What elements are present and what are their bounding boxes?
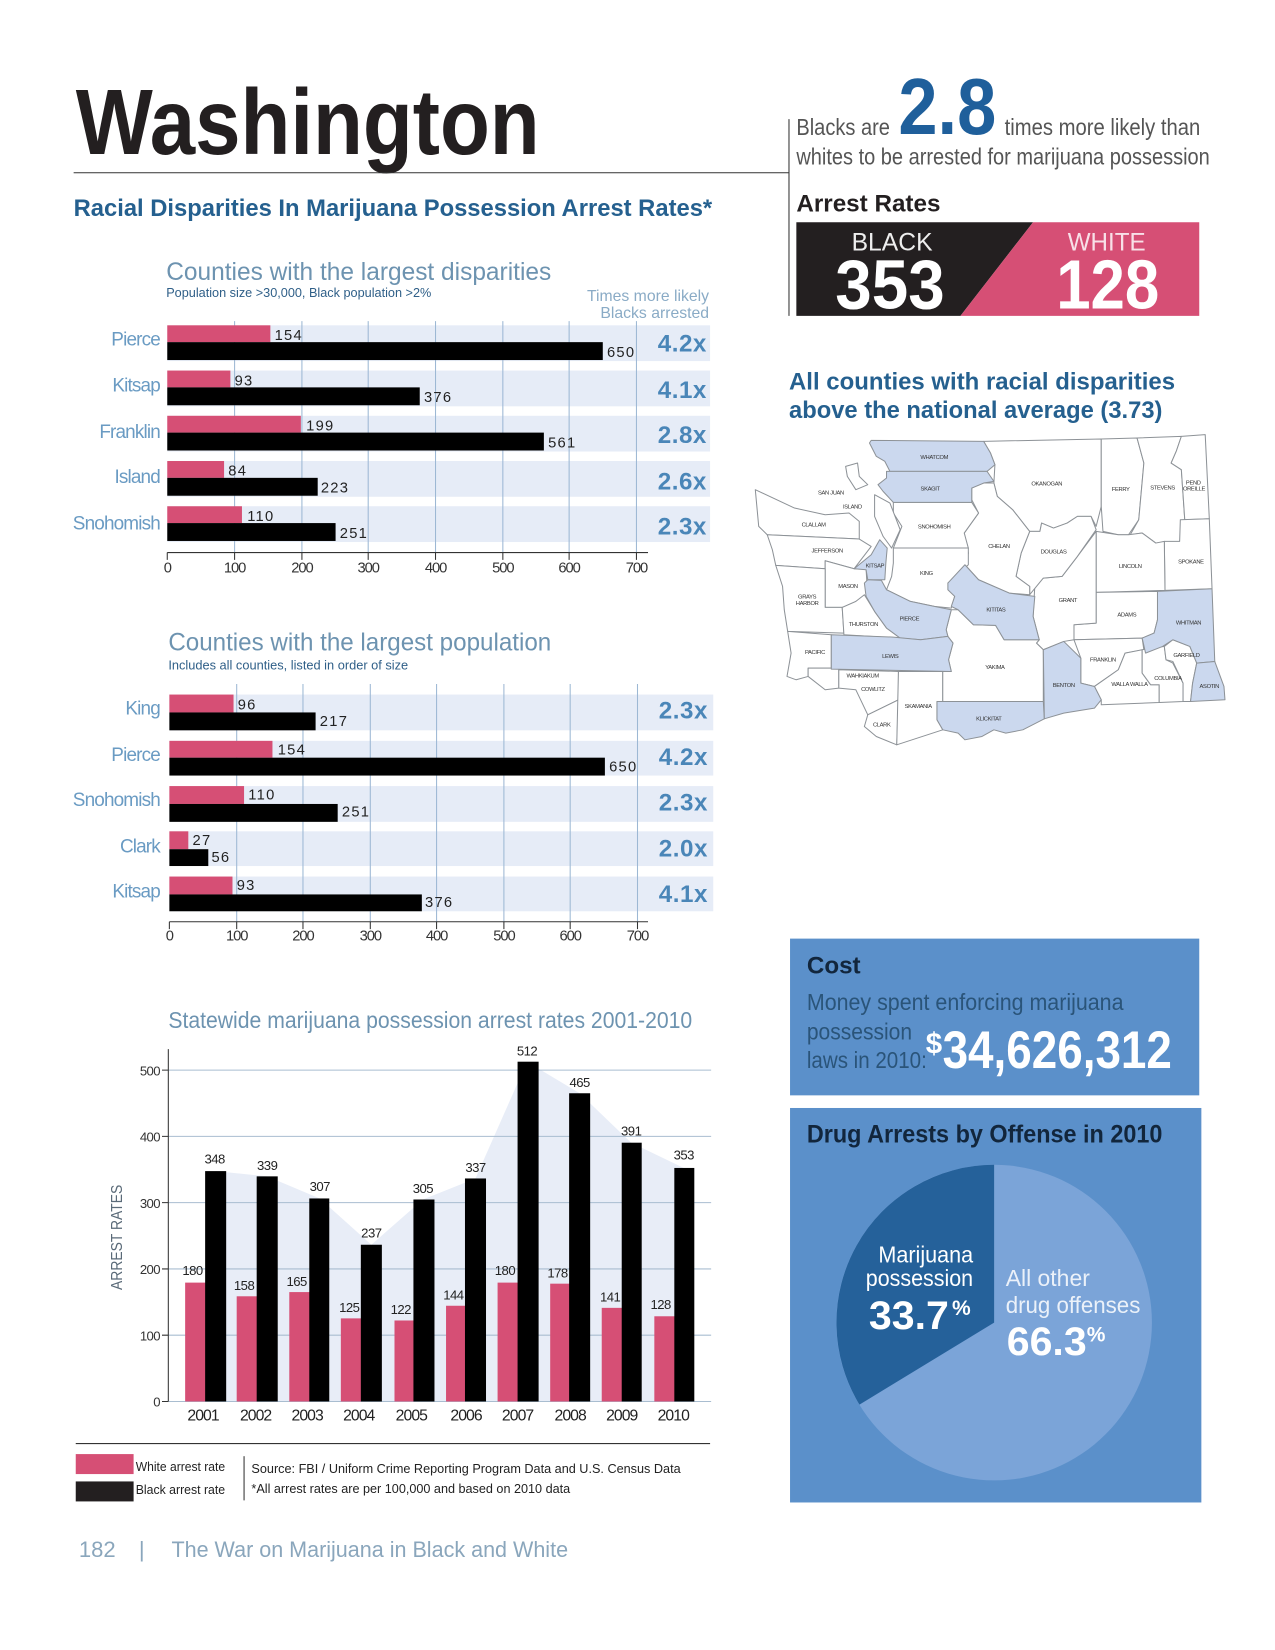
y axis: 500 xyxy=(140,1063,160,1078)
county labels: Clark xyxy=(120,836,161,857)
map: Washington counties: LEWIS xyxy=(882,654,899,660)
title: Washington xyxy=(76,70,540,174)
map: Washington counties: KLICKITAT xyxy=(976,717,1002,722)
county labels: Pierce xyxy=(111,329,160,350)
county labels: Snohomish xyxy=(73,513,160,534)
x axis: 400 xyxy=(425,561,447,577)
black value labels: 337 xyxy=(465,1160,486,1175)
multipliers: 4.1x xyxy=(658,377,707,404)
year labels: 2004 xyxy=(343,1407,376,1424)
map: Washington counties: ASOTIN xyxy=(1200,684,1219,690)
multipliers: 4.2x xyxy=(659,744,708,771)
y axis xyxy=(140,1049,168,1410)
map: Washington counties: SPOKANE xyxy=(1178,559,1204,565)
multipliers xyxy=(658,331,707,541)
map: Washington counties: SKAGIT xyxy=(921,486,941,492)
panel: cost: possession xyxy=(807,1019,912,1045)
map: Washington counties: STEVENS xyxy=(1150,486,1175,492)
pie chart xyxy=(836,1165,1152,1480)
map: Washington counties: CLARK xyxy=(873,723,891,728)
y axis: 200 xyxy=(140,1262,160,1277)
panel: arrest rates: Arrest Rates xyxy=(796,191,940,218)
value labels: 217 xyxy=(320,714,348,730)
panel: arrest rates: BLACK xyxy=(852,229,933,257)
year labels: 2008 xyxy=(555,1407,587,1424)
white value labels: 141 xyxy=(600,1290,621,1305)
panel: arrest rates: 353 xyxy=(835,245,945,323)
panel: cost: laws in 2010: xyxy=(807,1047,927,1073)
map: Washington counties: WHATCOM xyxy=(920,455,949,461)
y axis title: ARREST RATES xyxy=(109,1185,126,1290)
column heading: Blacks arrested xyxy=(600,305,709,322)
panel: counties with the largest disparities xyxy=(73,258,710,577)
value labels xyxy=(228,328,635,542)
map: Washington counties: KITSAP xyxy=(866,564,885,570)
value labels: 110 xyxy=(247,509,274,525)
chart title: Counties with the largest disparities xyxy=(166,258,551,286)
value labels: 251 xyxy=(340,526,368,542)
white value labels: 180 xyxy=(495,1263,515,1278)
map: Washington counties: BENTON xyxy=(1053,683,1075,689)
background area xyxy=(205,1062,694,1401)
multipliers: 2.3x xyxy=(659,698,708,725)
footer: The War on Marijuana in Black and White xyxy=(171,1537,568,1562)
white value labels: 158 xyxy=(234,1278,254,1293)
white value labels: 125 xyxy=(339,1300,360,1315)
map: Washington counties: THURSTON xyxy=(849,622,878,628)
black arrest bars xyxy=(205,1062,694,1401)
value labels: 376 xyxy=(424,390,452,406)
map: Washington counties: LINCOLN xyxy=(1119,564,1142,570)
label: all other drug offenses xyxy=(1006,1265,1140,1364)
column heading xyxy=(587,288,709,322)
y axis: 0 xyxy=(153,1395,160,1410)
value labels: 27 xyxy=(193,833,211,849)
map: Washington counties: PEND xyxy=(1186,480,1201,486)
multipliers: 2.3x xyxy=(659,789,708,816)
y axis: 300 xyxy=(140,1196,160,1211)
map: Washington counties: OKANOGAN xyxy=(1031,482,1062,488)
legend: Black arrest rate xyxy=(136,1483,225,1497)
white value labels: 180 xyxy=(182,1263,203,1278)
label: marijuana possession: Marijuana xyxy=(878,1242,973,1268)
map: Washington counties: WALLA WALLA xyxy=(1111,682,1148,688)
label: marijuana possession: possession xyxy=(866,1265,973,1291)
multipliers xyxy=(659,698,708,908)
chart subtitle: Includes all counties, listed in order of size xyxy=(168,657,408,672)
black value labels: 237 xyxy=(361,1225,382,1240)
x axis: 400 xyxy=(426,929,448,945)
x axis xyxy=(164,553,648,577)
value labels xyxy=(193,697,637,911)
map: Washington counties: SAN JUAN xyxy=(818,491,844,497)
x axis: 600 xyxy=(558,561,581,577)
map: Washington counties: GRAYS xyxy=(798,595,817,601)
county labels: Island xyxy=(114,467,160,488)
x axis: 300 xyxy=(360,929,382,945)
year labels: 2005 xyxy=(396,1407,428,1424)
source note: *All arrest rates are per 100,000 and based on 2010 data xyxy=(251,1481,571,1496)
map: Washington counties: WHITMAN xyxy=(1176,620,1201,626)
multipliers: 2.6x xyxy=(658,468,707,495)
map: Washington counties: GARFIELD xyxy=(1173,653,1200,659)
map: Washington counties: ISLAND xyxy=(843,504,862,510)
year labels: 2007 xyxy=(502,1407,533,1424)
x axis: 300 xyxy=(357,561,380,577)
legend xyxy=(76,1454,225,1501)
panel: counties with the largest population xyxy=(73,628,713,945)
county labels: Snohomish xyxy=(73,790,160,811)
x axis: 200 xyxy=(292,929,315,945)
map: Washington counties: ADAMS xyxy=(1117,612,1137,618)
black value labels: 348 xyxy=(204,1152,225,1167)
county labels xyxy=(73,699,161,903)
source note: Source: FBI / Uniform Crime Reporting Program Data and U.S. Census Data xyxy=(251,1461,681,1476)
x axis: 600 xyxy=(559,929,582,945)
value labels: 650 xyxy=(607,345,635,361)
white value labels: 122 xyxy=(391,1302,411,1317)
county labels: King xyxy=(125,699,160,720)
callout: 2.8 times more likely: whites to be arrested for marijuana possession xyxy=(795,143,1210,169)
county labels: Kitsap xyxy=(112,882,160,903)
y axis: 400 xyxy=(140,1130,160,1145)
map: Washington counties: GRANT xyxy=(1059,598,1078,604)
black arrest bars xyxy=(169,712,605,911)
panel: drug arrests by offense xyxy=(790,1108,1201,1502)
x axis: 200 xyxy=(291,561,313,577)
map: Washington counties: KING xyxy=(920,571,934,577)
panel: arrest rates xyxy=(796,191,1199,323)
map heading: All counties with racial disparities xyxy=(789,368,1175,395)
x axis: 100 xyxy=(226,929,248,945)
value labels: 93 xyxy=(237,878,256,894)
black value labels: 353 xyxy=(674,1148,694,1163)
panel: arrest rates: WHITE xyxy=(1068,229,1146,257)
multipliers: 4.2x xyxy=(658,331,707,358)
value labels: 561 xyxy=(548,435,576,451)
black value labels: 305 xyxy=(413,1181,433,1196)
map: Washington counties: KITITAS xyxy=(986,607,1006,613)
map: Washington counties: CHELAN xyxy=(988,544,1010,550)
label: marijuana possession: 33.7 xyxy=(869,1294,949,1338)
black value labels xyxy=(204,1043,694,1240)
map: Washington counties: SKAMANIA xyxy=(905,704,932,710)
white value labels: 178 xyxy=(547,1265,568,1280)
x axis: 700 xyxy=(626,561,648,577)
panel: cost: $ xyxy=(926,1027,942,1060)
map: Washington counties: COLUMBIA xyxy=(1154,676,1182,682)
white arrest bars xyxy=(169,695,272,894)
label: all other drug offenses: 66.3 xyxy=(1007,1320,1087,1364)
x axis: 0 xyxy=(166,929,174,945)
map: Washington counties: CLALLAM xyxy=(802,523,826,529)
white value labels: 144 xyxy=(443,1287,464,1302)
value labels: 199 xyxy=(306,419,334,435)
year labels xyxy=(187,1407,690,1424)
y axis: 100 xyxy=(140,1328,160,1343)
map: Washington counties xyxy=(755,435,1225,745)
white value labels: 165 xyxy=(286,1274,307,1289)
panel: cost xyxy=(790,939,1199,1095)
map: Washington counties: COWLITZ xyxy=(861,687,886,693)
chart title: Statewide marijuana possession arrest rates 2001-2010 xyxy=(168,1007,692,1033)
year labels: 2001 xyxy=(187,1407,219,1424)
value labels: 96 xyxy=(238,697,257,713)
year labels: 2006 xyxy=(450,1407,483,1424)
label: marijuana possession: % xyxy=(952,1297,971,1320)
multipliers: 4.1x xyxy=(659,881,708,908)
value labels: 84 xyxy=(228,464,247,480)
footer: | xyxy=(139,1537,145,1562)
white arrest bars xyxy=(185,1283,675,1401)
label: all other drug offenses: drug offenses xyxy=(1006,1292,1140,1318)
map: Washington counties: PIERCE xyxy=(900,616,920,622)
map: Washington counties: FERRY xyxy=(1112,487,1130,493)
county labels: Pierce xyxy=(111,745,160,766)
x axis xyxy=(166,922,649,945)
black value labels: 465 xyxy=(569,1075,590,1090)
callout: 2.8 times more likely: Blacks are xyxy=(796,114,890,140)
x axis: 700 xyxy=(627,929,649,945)
callout: 2.8 times more likely: 2.8 xyxy=(898,62,996,151)
year labels: 2003 xyxy=(292,1407,324,1424)
map: Washington counties: WAHKIAKUM xyxy=(846,673,879,679)
value labels: 650 xyxy=(609,759,637,775)
panel: drug arrests by offense: Drug Arrests by Offense in 2010 xyxy=(807,1121,1162,1149)
row bands xyxy=(169,695,713,911)
black value labels: 339 xyxy=(257,1158,278,1173)
column heading: Times more likely xyxy=(587,288,709,305)
value labels: 223 xyxy=(321,481,349,497)
x axis: 0 xyxy=(164,561,172,577)
callout: 2.8 times more likely: times more likely than xyxy=(1005,114,1200,140)
value labels: 376 xyxy=(425,895,453,911)
multipliers: 2.8x xyxy=(658,422,707,449)
multipliers: 2.0x xyxy=(659,836,708,863)
legend: White arrest rate xyxy=(136,1460,225,1474)
x axis: 500 xyxy=(493,929,515,945)
value labels: 154 xyxy=(278,743,306,759)
panel: cost: 34,626,312 xyxy=(943,1021,1172,1080)
value labels: 154 xyxy=(275,328,303,344)
row bands xyxy=(167,325,710,542)
value labels: 56 xyxy=(211,850,230,866)
panel: cost: Cost xyxy=(807,952,861,979)
value labels: 251 xyxy=(342,805,370,821)
label: marijuana possession xyxy=(866,1242,973,1338)
map: Washington counties: JEFFERSON xyxy=(812,548,843,554)
map: Washington counties: YAKIMA xyxy=(985,665,1005,671)
multipliers: 2.3x xyxy=(658,514,707,541)
black value labels: 391 xyxy=(621,1123,642,1138)
value labels: 110 xyxy=(248,788,276,804)
map: Washington counties: SNOHOMISH xyxy=(918,525,951,531)
map: Washington counties: MASON xyxy=(838,584,858,590)
map: Washington counties: FRANKLIN xyxy=(1090,657,1116,663)
panel: statewide arrest rates xyxy=(109,1007,711,1424)
map: Washington counties: DOUGLAS xyxy=(1041,550,1067,556)
panel: cost: Money spent enforcing marijuana xyxy=(807,989,1124,1015)
white arrest bars xyxy=(167,325,301,523)
county labels xyxy=(73,329,160,534)
footer: 182 xyxy=(79,1537,116,1562)
callout: 2.8 times more likely xyxy=(795,62,1210,169)
heading: racial disparities: Racial Disparities In Marijuana Possession Arrest Rates* xyxy=(74,195,713,222)
year labels: 2009 xyxy=(606,1407,639,1424)
map: Washington counties: OREILLE xyxy=(1183,486,1206,492)
value labels: 93 xyxy=(235,373,253,389)
black value labels: 512 xyxy=(517,1043,537,1058)
year labels: 2002 xyxy=(240,1407,271,1424)
year labels: 2010 xyxy=(658,1407,690,1424)
white value labels xyxy=(182,1263,671,1317)
black arrest bars xyxy=(167,342,603,541)
label: all other drug offenses: All other xyxy=(1006,1265,1090,1291)
map: Washington counties: HARBOR xyxy=(796,601,819,607)
black value labels: 307 xyxy=(310,1179,330,1194)
x axis: 500 xyxy=(492,561,514,577)
panel: arrest rates: 128 xyxy=(1056,245,1159,323)
map: Washington counties: PACIFIC xyxy=(805,650,825,656)
chart title: Counties with the largest population xyxy=(168,628,551,656)
map heading: above the national average (3.73) xyxy=(789,397,1162,424)
x axis: 100 xyxy=(224,561,246,577)
map heading xyxy=(789,368,1175,424)
county labels: Franklin xyxy=(99,422,160,443)
source note xyxy=(251,1461,681,1496)
chart subtitle: Population size >30,000, Black population >2% xyxy=(166,285,432,300)
county labels: Kitsap xyxy=(112,376,160,397)
label: all other drug offenses: % xyxy=(1087,1324,1106,1347)
white value labels: 128 xyxy=(650,1297,671,1312)
